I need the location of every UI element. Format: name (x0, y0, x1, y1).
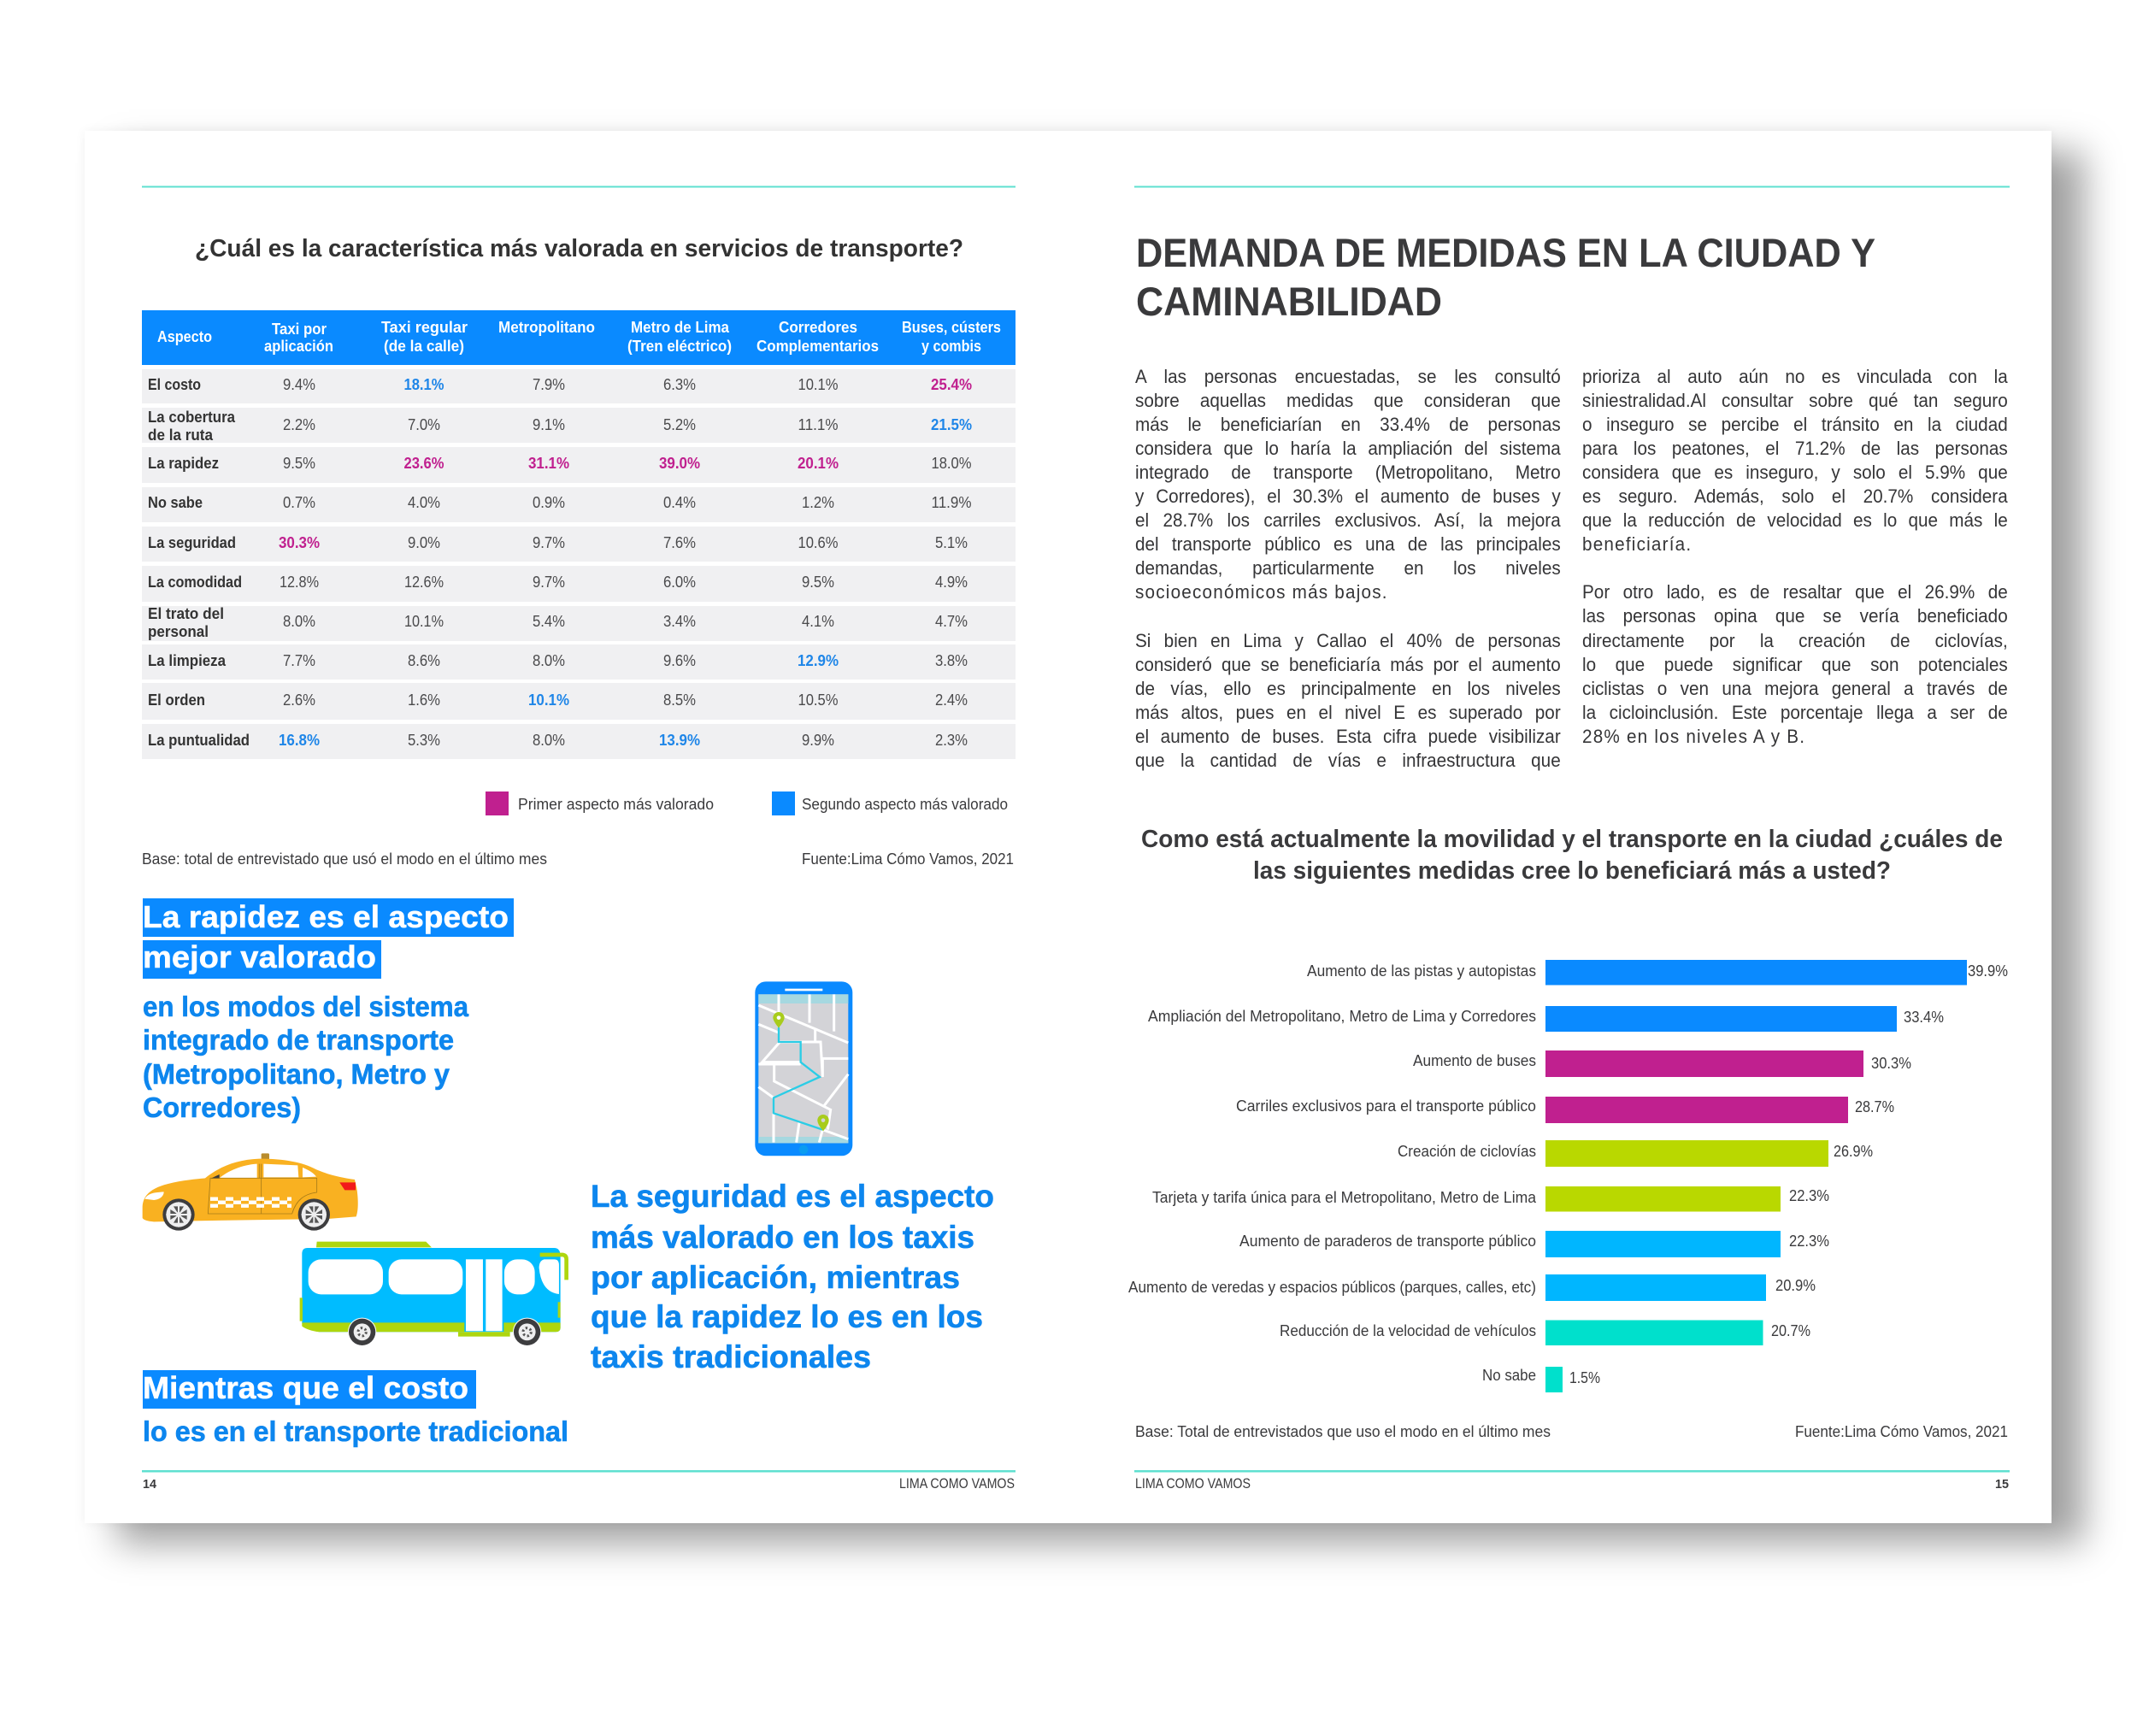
row: No sabe (142, 487, 1016, 522)
row: La limpieza: 8.6% (408, 652, 440, 669)
row: La cobertura de la ruta: 5.2% (663, 416, 696, 433)
panel: book spread page with shadow (85, 131, 2052, 1523)
table header: Aspecto (157, 328, 212, 345)
text: modes of integrated system: en los modos del sistema (143, 991, 469, 1022)
text block: left column: demandas, particularmente en los niveles (1135, 557, 1561, 579)
legend: Segundo aspecto más valorado (802, 796, 1008, 813)
table base note: Base: total de entrevistado que usó el modo en el último mes (142, 850, 547, 868)
text block: left column: que la cantidad de vías e infraestructura que (1135, 750, 1561, 771)
chart title: las siguientes medidas cree lo beneficiará más a usted? (1253, 857, 1891, 885)
bar: tarjeta y tarifa: Tarjeta y tarifa única para el Metropolitano, Metro de Lima (1152, 1189, 1537, 1206)
row: El orden: 2.6% (283, 691, 315, 709)
text block: left column: consideró que se beneficiaría más por el aumento (1135, 654, 1561, 675)
row: La cobertura de la ruta: La cobertura (148, 409, 236, 426)
bar: ciclovías (1398, 1140, 1873, 1167)
bar: tarjeta y tarifa: 22.3% (1789, 1187, 1829, 1204)
row: La puntualidad: La puntualidad (148, 732, 250, 749)
row: El trato del personal: El trato del (148, 605, 224, 622)
text block: left column: y Corredores), el 30.3% el aumento de buses y (1135, 485, 1561, 507)
bar: velocidad (1280, 1320, 1810, 1345)
row: La limpieza: 8.0% (533, 652, 565, 669)
row: La rapidez (142, 447, 1016, 483)
bar: paraderos: 22.3% (1789, 1233, 1829, 1250)
row: La seguridad: 9.0% (408, 534, 440, 551)
bar: veredas: 20.9% (1775, 1277, 1816, 1294)
row: La puntualidad: 2.3% (935, 732, 968, 749)
text block: right column: prioriza al auto aún no es vinculada con la (1582, 366, 2008, 386)
table header: y combis (921, 338, 981, 355)
row: No sabe: 0.4% (663, 494, 696, 511)
row: La puntualidad (142, 724, 1016, 759)
row: El orden: 10.1% (528, 691, 569, 709)
text: modes of integrated system: (Metropolitano, Metro y (143, 1058, 450, 1090)
row: La comodidad: 9.5% (802, 574, 834, 591)
text block: right column: la cicloinclusión. Este porcentaje llega a ser de (1582, 702, 2008, 723)
row: La puntualidad: 13.9% (659, 732, 700, 749)
table header: Taxi por (272, 321, 327, 338)
bar: paraderos: Aumento de paraderos de transporte público (1239, 1233, 1536, 1250)
row: El costo: 6.3% (663, 376, 696, 393)
row: El orden: 8.5% (663, 691, 696, 709)
row: El costo: 18.1% (403, 376, 444, 393)
text: safety callout: La seguridad es el aspecto (591, 1179, 994, 1214)
table header: Buses, cústers (902, 319, 1001, 336)
row: El trato del personal: 8.0% (283, 613, 315, 630)
text block: right column: Por otro lado, es de resaltar que el 26.9% de (1582, 581, 2008, 603)
bar: ciclovías: Creación de ciclovías (1398, 1143, 1536, 1160)
bar: pistas y autopistas: 39.9% (1968, 962, 2008, 980)
bar: pistas y autopistas (1307, 960, 2008, 985)
text: safety callout: que la rapidez lo es en los (591, 1299, 983, 1334)
row: La seguridad: 10.6% (798, 534, 838, 551)
callout: la rapidez (143, 898, 514, 979)
row: La puntualidad: 5.3% (408, 732, 440, 749)
text block: left column: más altos, pues en el nivel E es superado por (1135, 702, 1561, 723)
row: El costo (142, 369, 1016, 403)
text block: right column: que la reducción de velocidad es lo que más le (1582, 509, 2008, 531)
callout: la rapidez: mejor valorado (143, 939, 376, 974)
text block: left column: considera que lo haría la ampliación del sistema (1135, 438, 1561, 459)
bar: aumento de buses (1413, 1050, 1911, 1077)
bar: ampliación metropolitano (1148, 1006, 1944, 1032)
row: El costo: 10.1% (798, 376, 838, 393)
row: El trato del personal: personal (148, 623, 209, 640)
text block: left column: Si bien en Lima y Callao el 40% de personas (1135, 630, 1561, 651)
text block: right column: o inseguro se percibe el tránsito en la ciudad (1582, 414, 2008, 435)
chart base note: Base: Total de entrevistados que uso el modo en el último mes (1135, 1423, 1551, 1440)
text block: left column: el 28.7% los carriles exclusivos. Así, la mejora (1135, 509, 1561, 531)
bar: veredas: Aumento de veredas y espacios públicos (parques, calles, etc) (1128, 1279, 1536, 1296)
row: No sabe: 0.9% (533, 494, 565, 511)
chart title (1141, 826, 2003, 885)
row: La limpieza: 7.7% (283, 652, 315, 669)
callout: la rapidez: La rapidez es el aspecto (143, 899, 509, 934)
row: La rapidez: 39.0% (659, 455, 700, 472)
text block: right column: las personas opina que se vería beneficiado (1582, 605, 2008, 627)
row: La rapidez: 9.5% (283, 455, 315, 472)
bar: ciclovías: 26.9% (1834, 1143, 1873, 1160)
row: No sabe: 4.0% (408, 494, 440, 511)
text block: left column (1135, 366, 1561, 771)
row: La rapidez: 31.1% (528, 455, 569, 472)
icon: phone with map route (755, 981, 852, 1156)
row: La limpieza: 9.6% (663, 652, 696, 669)
row: El costo: El costo (148, 376, 201, 393)
table header: Complementarios (756, 338, 879, 355)
row: La limpieza: 3.8% (935, 652, 968, 669)
bar: no sabe: No sabe (1482, 1367, 1536, 1384)
text block: left column: socioeconómicos más bajos. (1135, 581, 1388, 603)
bar: ampliación metropolitano: Ampliación del Metropolitano, Metro de Lima y Corredores (1148, 1008, 1536, 1025)
row: El orden (142, 683, 1016, 720)
text block: right column: es seguro. Además, solo el 20.7% considera (1582, 485, 2008, 507)
row: No sabe: 1.2% (802, 494, 834, 511)
icon: blue bus (300, 1242, 567, 1346)
heading: demanda de medidas: CAMINABILIDAD (1136, 279, 1442, 324)
bar: ampliación metropolitano: 33.4% (1904, 1009, 1944, 1026)
row: No sabe: No sabe (148, 494, 203, 511)
text block: left column: más le beneficiarían en 33.4% de personas (1135, 414, 1561, 435)
text block: right column: lo que puede significar que son potenciales (1582, 654, 2008, 675)
row: No sabe: 0.7% (283, 494, 315, 511)
row: La cobertura de la ruta: de la ruta (148, 427, 214, 444)
row: El costo: 25.4% (931, 376, 972, 393)
table header (142, 310, 1016, 365)
row: La cobertura de la ruta (142, 408, 1016, 444)
row: La cobertura de la ruta: 11.1% (798, 416, 838, 433)
row: La comodidad: 4.9% (935, 574, 968, 591)
row: El costo: 7.9% (533, 376, 565, 393)
bar chart: medidas (1128, 960, 2008, 1392)
chart title: Como está actualmente la movilidad y el transporte en la ciudad ¿cuáles de (1141, 826, 2003, 853)
row: La puntualidad: 9.9% (802, 732, 834, 749)
row: La rapidez: 23.6% (403, 455, 444, 472)
table header: Taxi regular (381, 319, 468, 336)
heading: demanda de medidas (1136, 230, 1875, 324)
bar: pistas y autopistas: Aumento de las pistas y autopistas (1307, 962, 1536, 980)
bar: paraderos (1239, 1231, 1829, 1257)
text block: right column: 28% en los niveles A y B. (1582, 726, 1805, 747)
text: safety callout: taxis tradicionales (591, 1339, 871, 1374)
row: La seguridad: 5.1% (935, 534, 968, 551)
text: transporte tradicional: lo es en el transporte tradicional (143, 1415, 568, 1447)
row: La comodidad: 9.7% (533, 574, 565, 591)
bar: velocidad: Reducción de la velocidad de vehículos (1280, 1322, 1536, 1339)
legend: Primer aspecto más valorado (518, 796, 714, 813)
footer left: publisher: LIMA COMO VAMOS (899, 1475, 1015, 1492)
chart source note: Fuente:Lima Cómo Vamos, 2021 (1795, 1423, 2008, 1440)
row: El orden: El orden (148, 691, 205, 709)
icon: yellow taxi (143, 1153, 358, 1231)
text: modes of integrated system: Corredores) (143, 1092, 301, 1123)
row: La seguridad: La seguridad (148, 534, 236, 551)
text block: right column (1582, 366, 2008, 747)
row: El trato del personal: 4.7% (935, 613, 968, 630)
text block: left column: el aumento de buses. Esta cifra puede visibilizar (1135, 726, 1561, 747)
row: La seguridad: 9.7% (533, 534, 565, 551)
row: El trato del personal: 5.4% (533, 613, 565, 630)
row: El trato del personal: 10.1% (404, 613, 444, 630)
text: safety callout: por aplicación, mientras (591, 1260, 960, 1295)
bar: no sabe (1482, 1367, 1600, 1392)
row: El trato del personal (142, 605, 1016, 641)
text block: right column: siniestralidad.Al consultar sobre qué tan seguro (1582, 390, 2008, 411)
text block: right column: para los peatones, el 71.2% de las personas (1582, 438, 2008, 459)
row: La seguridad: 7.6% (663, 534, 696, 551)
row: La cobertura de la ruta: 21.5% (931, 416, 972, 433)
bar: velocidad: 20.7% (1771, 1322, 1810, 1339)
table header: (de la calle) (384, 338, 464, 355)
text block: right column: considera que es inseguro, y solo el 5.9% que (1582, 462, 2008, 483)
row: La seguridad (142, 527, 1016, 562)
row: La limpieza (142, 644, 1016, 680)
row: El orden: 1.6% (408, 691, 440, 709)
row: La limpieza: 12.9% (798, 652, 839, 669)
row: La comodidad: La comodidad (148, 574, 242, 591)
bar: aumento de buses: Aumento de buses (1413, 1052, 1536, 1069)
row: El orden: 10.5% (798, 691, 838, 709)
row: El orden: 2.4% (935, 691, 968, 709)
row: El trato del personal: 3.4% (663, 613, 696, 630)
text: modes of integrated system (143, 991, 469, 1123)
bar: carriles exclusivos (1236, 1097, 1894, 1123)
bar: no sabe: 1.5% (1569, 1369, 1600, 1386)
footer right: publisher: LIMA COMO VAMOS (1135, 1475, 1251, 1492)
table source note: Fuente:Lima Cómo Vamos, 2021 (802, 850, 1014, 868)
table header: (Tren eléctrico) (627, 338, 732, 355)
text block: left column: del transporte público es una de las principales (1135, 533, 1561, 555)
legend (486, 791, 1008, 815)
row: La cobertura de la ruta: 9.1% (533, 416, 565, 433)
bar: aumento de buses: 30.3% (1871, 1055, 1911, 1072)
row: La rapidez: 18.0% (932, 455, 971, 472)
text block: left column: de vías, ello es principalmente en los niveles (1135, 678, 1561, 699)
text block: left column: integrado de transporte (Metropolitano, Metro (1135, 462, 1561, 483)
row: No sabe: 11.9% (932, 494, 971, 511)
row: La puntualidad: 8.0% (533, 732, 565, 749)
footer left: page number: 14 (143, 1477, 157, 1492)
text block: right column: beneficiaría. (1582, 533, 1692, 555)
row: La comodidad: 12.6% (404, 574, 444, 591)
row: La puntualidad: 16.8% (279, 732, 320, 749)
row: La limpieza: La limpieza (148, 652, 227, 669)
table: most valued aspects (142, 310, 1016, 759)
text: modes of integrated system: integrado de transporte (143, 1024, 454, 1056)
table header: Metro de Lima (631, 319, 730, 336)
callout: mientras que el costo: Mientras que el costo (143, 1370, 468, 1405)
text block: left column: A las personas encuestadas, se les consultó (1135, 366, 1561, 386)
bar: carriles exclusivos: Carriles exclusivos para el transporte público (1236, 1098, 1536, 1115)
row: La cobertura de la ruta: 7.0% (408, 416, 440, 433)
text: safety callout: más valorado en los taxis (591, 1220, 974, 1255)
row: El costo: 9.4% (283, 376, 315, 393)
text: safety callout (591, 1179, 994, 1374)
bar: carriles exclusivos: 28.7% (1855, 1098, 1894, 1115)
row: La rapidez: La rapidez (148, 455, 219, 472)
row: La comodidad (142, 566, 1016, 602)
text block: right column: directamente por la creación de ciclovías, (1582, 630, 2008, 651)
bar: tarjeta y tarifa (1152, 1186, 1829, 1212)
row: La seguridad: 30.3% (279, 534, 320, 551)
row: La cobertura de la ruta: 2.2% (283, 416, 315, 433)
table header: Corredores (779, 319, 857, 336)
title: table question: ¿Cuál es la característica más valorada en servicios de transporte? (195, 235, 963, 262)
bar: veredas (1128, 1274, 1816, 1301)
heading: demanda de medidas: DEMANDA DE MEDIDAS EN LA CIUDAD Y (1136, 230, 1875, 275)
row: La comodidad: 6.0% (663, 574, 696, 591)
table header: aplicación (264, 338, 333, 355)
text block: left column: sobre aquellas medidas que consideran que (1135, 390, 1561, 411)
row: La rapidez: 20.1% (798, 455, 839, 472)
text block: right column: ciclistas o ven una mejora general a través de (1582, 678, 2008, 699)
row: La comodidad: 12.8% (280, 574, 319, 591)
row: El trato del personal: 4.1% (802, 613, 834, 630)
table header: Metropolitano (498, 319, 595, 336)
footer right: page number: 15 (1995, 1477, 2009, 1492)
